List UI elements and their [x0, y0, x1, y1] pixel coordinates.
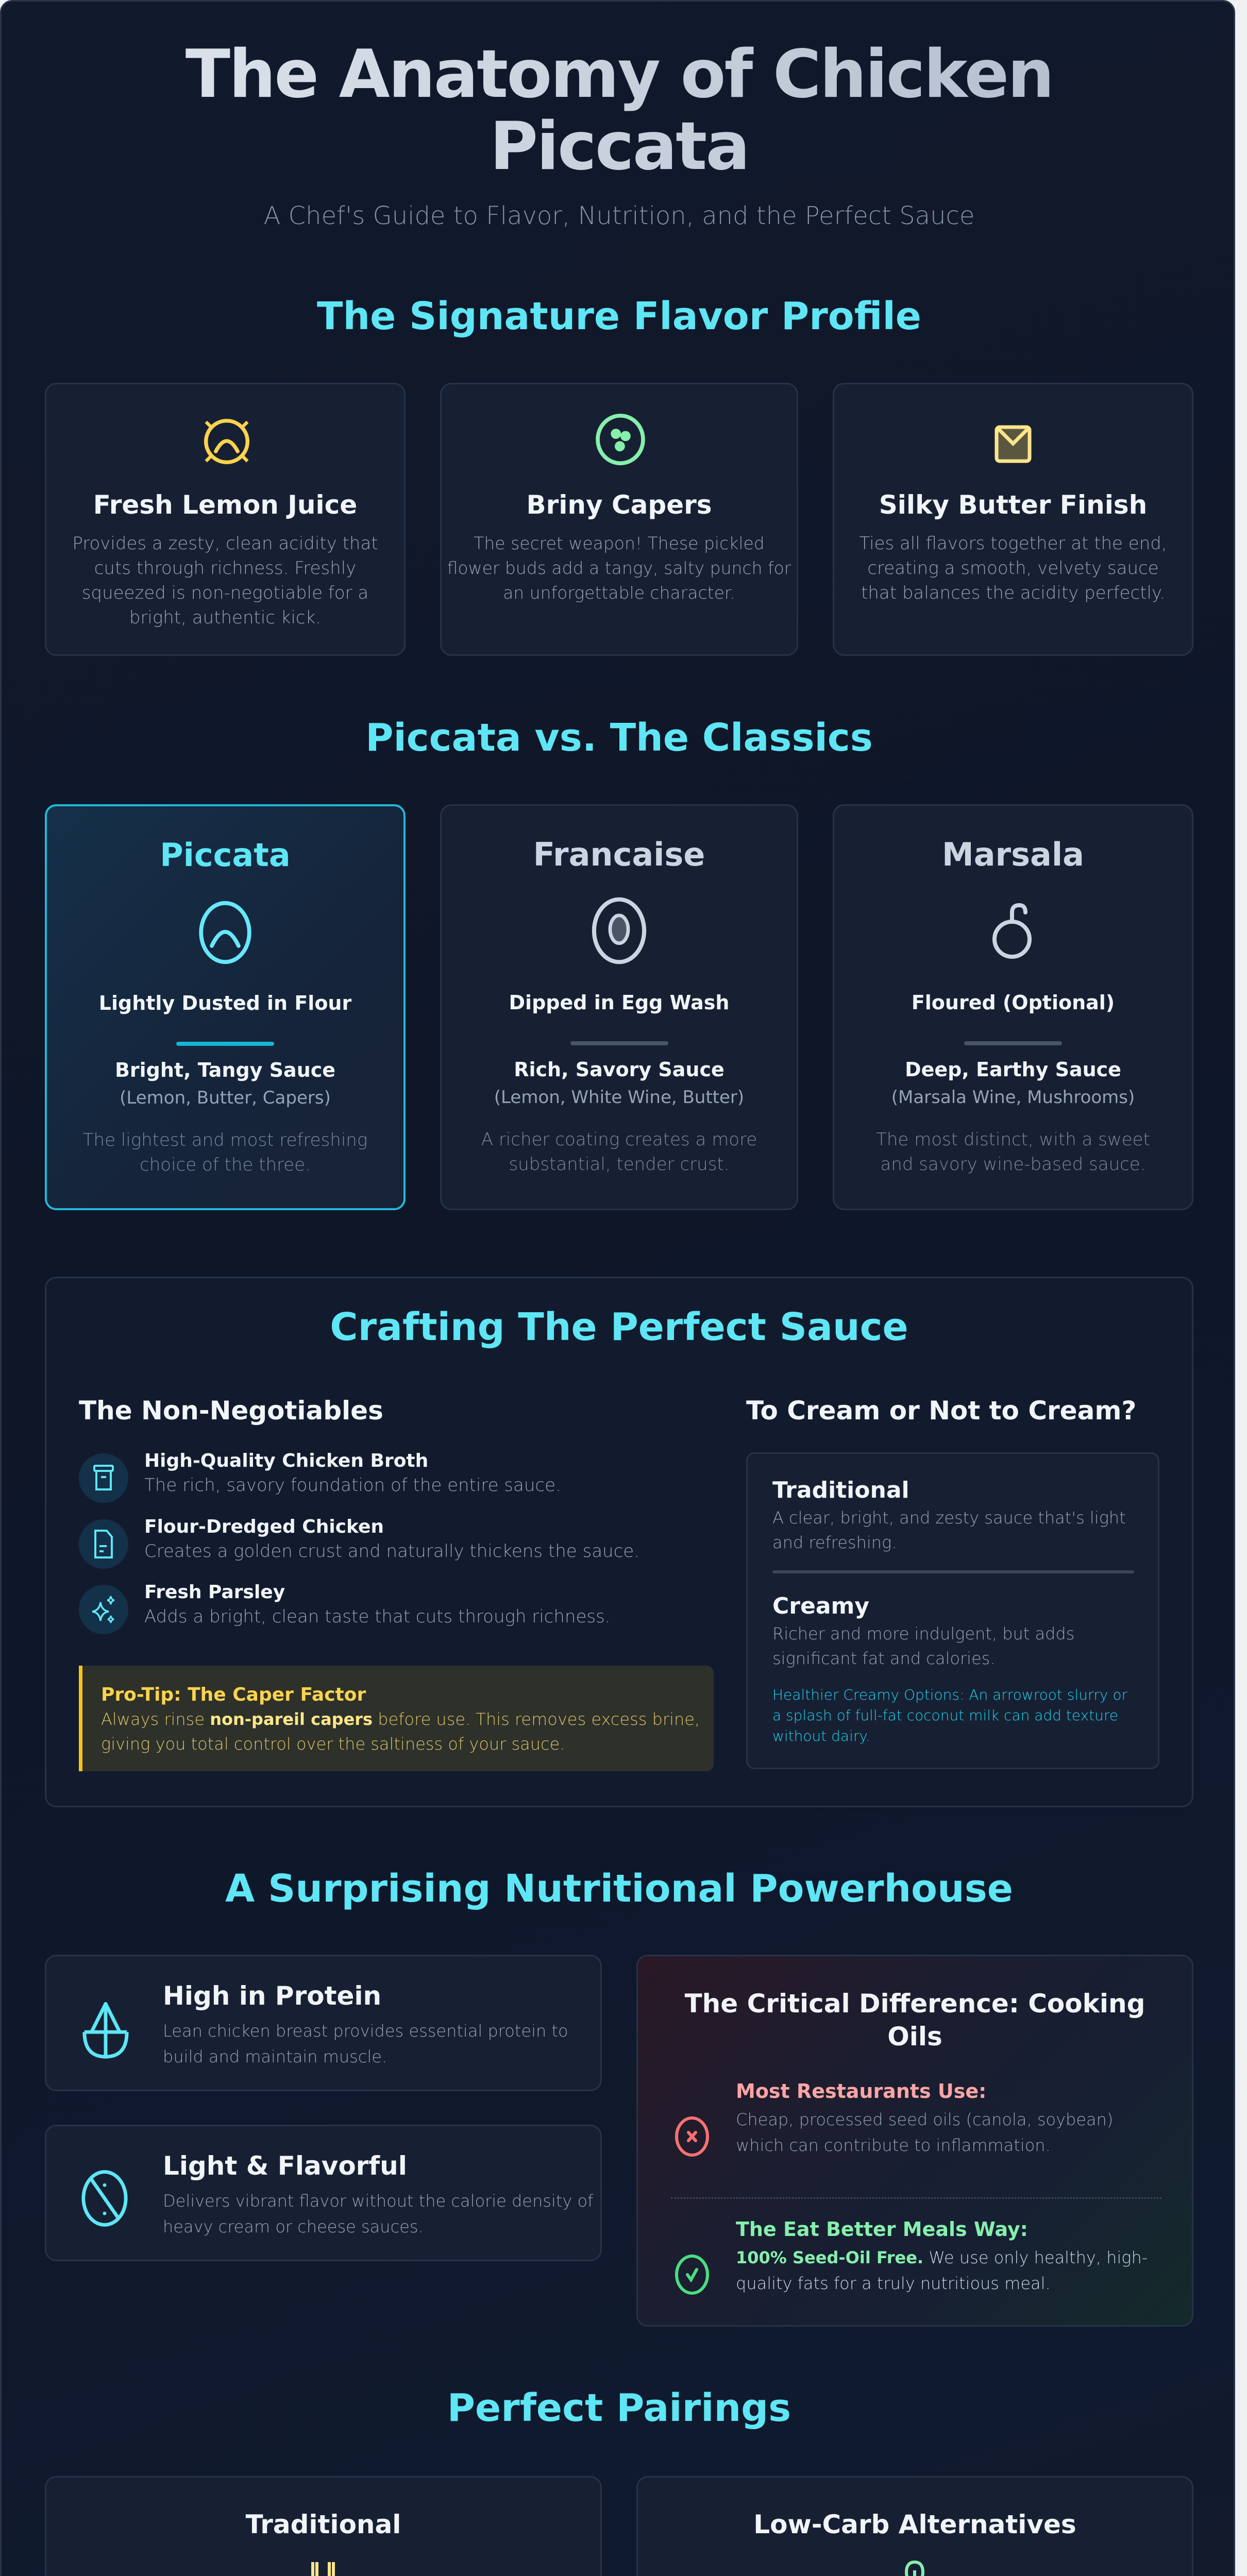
card: lemon: Provides a zesty, clean acidity that cuts through richness. Freshly squeezed is non-negotiable for a bright, authentic kick. [72, 533, 378, 628]
icon: butter [995, 426, 1032, 463]
callout: pro-tip: Pro-Tip: The Caper Factor [101, 1684, 366, 1705]
heading: Crafting The Perfect Sauce [330, 1305, 908, 1349]
card: piccata: Bright, Tangy Sauce [115, 1059, 335, 1081]
item: parsley [79, 1582, 611, 1634]
card: light and flavorful: Delivers vibrant flavor without the calorie density of heavy cream or cheese sauces. [163, 2191, 593, 2236]
card: piccata: Piccata [160, 836, 291, 874]
card: butter: Silky Butter Finish [879, 490, 1147, 520]
list: ingredients [79, 1450, 639, 1634]
item: restaurants: Most Restaurants Use: [736, 2080, 986, 2103]
title [2, 39, 1237, 183]
card: light and flavorful: Light & Flavorful [163, 2151, 407, 2181]
heading: nutritional powerhouse: A Surprising Nutritional Powerhouse [225, 1867, 1013, 1911]
panel: comparison cards [45, 804, 1193, 1210]
item: parsley: Adds a bright, clean taste that cuts through richness. [144, 1606, 611, 1627]
icon: lemon [204, 419, 249, 464]
icon: mushroom [992, 903, 1032, 959]
card: marsala: The most distinct, with a sweet and savory wine-based sauce. [876, 1129, 1150, 1175]
card: capers: Briny Capers [526, 490, 712, 520]
card: high in protein [45, 1955, 602, 2091]
card: low-carb: Low-Carb Alternatives [753, 2510, 1076, 2539]
panel: cream comparison: Traditional [772, 1477, 909, 1503]
icon: flour [199, 901, 251, 964]
icon: sprout [905, 2561, 924, 2576]
card: butter [833, 383, 1193, 656]
item: restaurants [675, 2080, 1113, 2157]
item: eat better meals way: The Eat Better Meals Way: [736, 2218, 1028, 2241]
item: parsley: Fresh Parsley [144, 1582, 285, 1603]
callout: pro-tip: Always rinse non-pareil capers before use. This removes excess brine, giving you total control over the saltiness of your sauce. [101, 1709, 700, 1754]
card: francaise: Rich, Savory Sauce [514, 1058, 724, 1081]
card: marsala: Deep, Earthy Sauce [905, 1058, 1121, 1081]
card: light and flavorful [45, 2125, 602, 2261]
item: restaurants: Cheap, processed seed oils (canola, soybean) which can contribute to inflammation. [736, 2110, 1113, 2155]
panel: cream comparison: Richer and more indulgent, but adds significant fat and calories. [772, 1624, 1074, 1668]
panel: flavor cards [45, 383, 1193, 656]
panel: cream comparison: A clear, bright, and zesty sauce that's light and refreshing. [772, 1508, 1126, 1552]
panel: cream comparison: Healthier Creamy Options: An arrowroot slurry or a splash of full-fat coconut milk can add texture without dairy. [772, 1686, 1127, 1744]
card: marsala [833, 804, 1193, 1210]
card: piccata: The lightest and most refreshing choice of the three. [83, 1130, 367, 1175]
item: eat better meals way: 100% Seed-Oil Free. We use only healthy, high-quality fats for a truly nutritious meal. [736, 2248, 1148, 2293]
card: francaise: Francaise [533, 836, 705, 873]
item: flour-dredged: Flour-Dredged Chicken [144, 1516, 384, 1537]
icon: egg [592, 897, 646, 964]
heading: The Critical Difference: Cooking Oils [685, 1989, 1145, 2052]
card: low-carb [636, 2476, 1193, 2576]
icon: no-cream [81, 2170, 128, 2227]
heading: perfect pairings: Perfect Pairings [447, 2386, 791, 2430]
card: marsala: (Marsala Wine, Mushrooms) [891, 1087, 1135, 1108]
heading: signature flavor profile: The Signature Flavor Profile [317, 294, 921, 338]
icon: protein [82, 2002, 129, 2059]
card: marsala: Floured (Optional) [912, 991, 1115, 1014]
panel: crafting the perfect sauce [45, 1277, 1193, 1807]
item: broth: High-Quality Chicken Broth [144, 1450, 428, 1471]
heading: piccata vs classics: Piccata vs. The Classics [365, 716, 873, 760]
card: piccata: Lightly Dusted in Flour [99, 992, 351, 1014]
card: capers: The secret weapon! These pickled flower buds add a tangy, salty punch for an unforgettable character. [447, 533, 791, 603]
subheading: non-negotiables: The Non-Negotiables [79, 1396, 383, 1426]
title: The Anatomy of Chicken [186, 36, 1053, 113]
card: francaise [440, 804, 798, 1210]
panel: cream comparison: Creamy [772, 1593, 869, 1619]
subtitle: A Chef's Guide to Flavor, Nutrition, and the Perfect Sauce [264, 201, 974, 230]
card: piccata: (Lemon, Butter, Capers) [120, 1088, 331, 1108]
subheading: to cream: To Cream or Not to Cream? [746, 1396, 1136, 1426]
callout: pro-tip [79, 1666, 714, 1771]
card: piccata [45, 804, 406, 1210]
item: eat better meals way [675, 2218, 1148, 2295]
card: francaise: Dipped in Egg Wash [509, 991, 729, 1014]
item: broth: The rich, savory foundation of the entire sauce. [144, 1475, 561, 1496]
card: high in protein: High in Protein [163, 1981, 381, 2011]
panel: cream comparison [746, 1452, 1159, 1769]
card: lemon: Fresh Lemon Juice [93, 490, 357, 520]
item: flour-dredged [79, 1516, 639, 1569]
item: flour-dredged: Creates a golden crust and naturally thickens the sauce. [144, 1541, 639, 1562]
card: francaise: A richer coating creates a more substantial, tender crust. [481, 1129, 757, 1175]
divider dotted [671, 2197, 1161, 2199]
title: Piccata [490, 108, 749, 185]
card: high in protein: Lean chicken breast provides essential protein to build and maintain muscle. [163, 2021, 568, 2066]
card: capers [440, 383, 798, 656]
panel: cooking oils [636, 1955, 1193, 2327]
card: butter: Ties all flavors together at the end, creating a smooth, velvety sauce that balances the acidity perfectly. [859, 533, 1167, 603]
card: traditional pairing [45, 2476, 602, 2576]
card: traditional pairing: Traditional [246, 2510, 401, 2539]
card: lemon [45, 383, 406, 656]
icon: pasta [311, 2562, 335, 2576]
icon: capers [596, 414, 645, 465]
item: broth [79, 1450, 561, 1503]
card: francaise: (Lemon, White Wine, Butter) [494, 1087, 744, 1108]
card: marsala: Marsala [942, 836, 1084, 873]
